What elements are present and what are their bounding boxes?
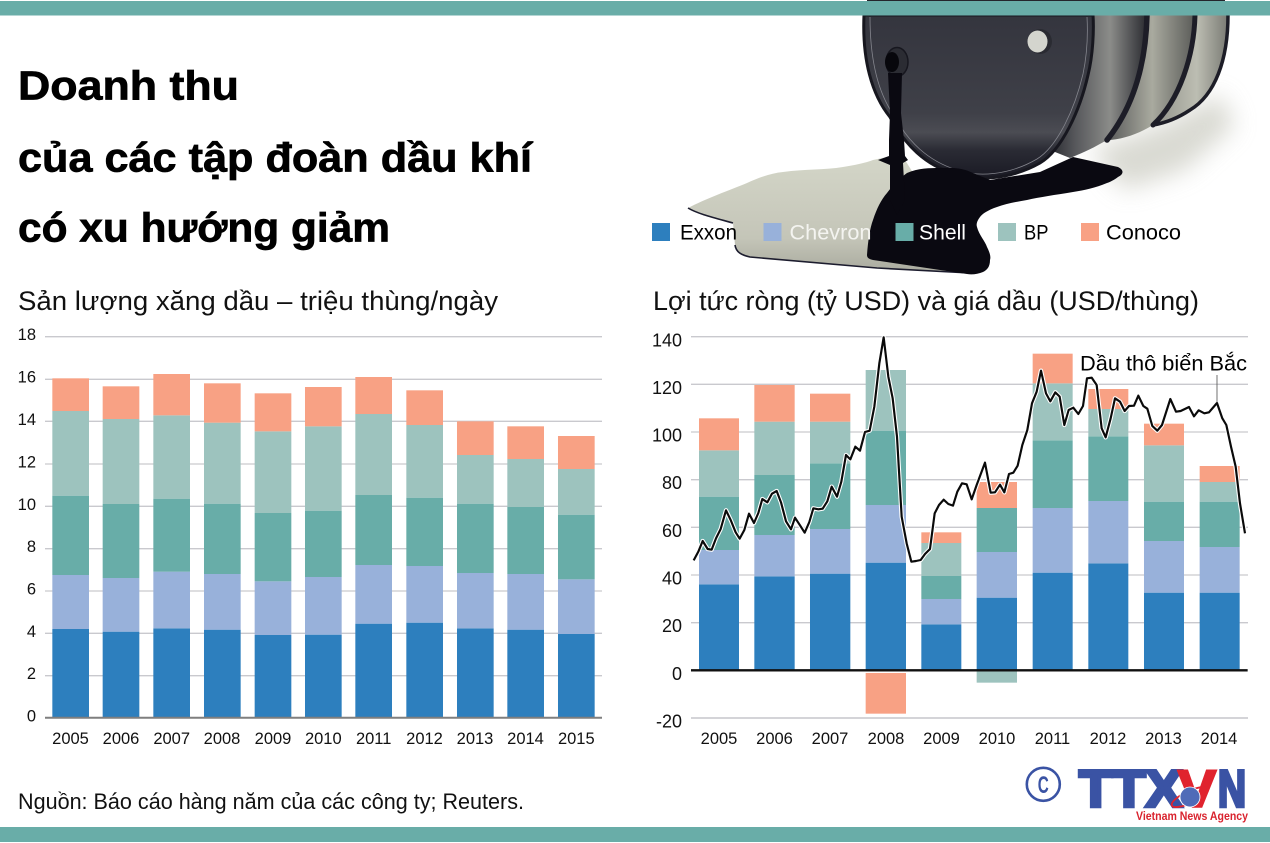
- left chart y-axis labels: 16: [18, 368, 36, 386]
- title: [18, 62, 534, 250]
- price line halo: [694, 337, 1245, 562]
- right chart: net profit stacked bars and oil price line: [652, 330, 1248, 748]
- left chart bars: [52, 374, 595, 718]
- legend item: Exxon: Exxon: [680, 220, 737, 244]
- right chart y-axis labels: 80: [662, 473, 682, 493]
- legend item: Chevron: Chevron: [790, 220, 872, 244]
- left chart x-axis years: 2011: [356, 730, 391, 748]
- barrel hole: [885, 48, 908, 76]
- left chart y-axis labels: 8: [27, 538, 36, 556]
- right chart x-axis years: 2007: [812, 730, 848, 748]
- North Sea crude price line: [694, 337, 1245, 562]
- zero baseline: [691, 667, 1248, 674]
- left chart x-axis years: 2014: [507, 730, 544, 748]
- right chart y-axis labels: [652, 330, 682, 732]
- left chart x-axis years: 2005: [52, 730, 89, 748]
- right chart x-axis years: [701, 730, 1237, 748]
- right chart y-axis labels: 140: [652, 330, 682, 350]
- left chart y-axis labels: 0: [27, 708, 36, 726]
- right chart y-axis labels: -20: [656, 712, 682, 732]
- title: của các tập đoàn dầu khí: [18, 134, 534, 180]
- logo globe: [1169, 783, 1211, 811]
- line callout leader: [1216, 375, 1218, 402]
- legend item: Conoco: Conoco: [1106, 220, 1181, 244]
- legend item: BP: BP: [1024, 220, 1048, 244]
- barrel front band: [1050, 15, 1147, 158]
- right chart y-axis labels: 20: [662, 616, 682, 636]
- legend item: Shell: Shell: [919, 220, 966, 244]
- left chart x-axis years: [52, 730, 595, 748]
- logo: copyright mark: [1027, 768, 1060, 801]
- logo: TTXVN Vietnam News Agency: Vietnam News Agency: [1136, 811, 1249, 823]
- right chart y-axis labels: 120: [652, 378, 682, 398]
- left chart x-axis years: 2006: [103, 730, 139, 748]
- legend item: Exxon: [652, 220, 737, 244]
- left chart x-axis years: 2010: [305, 730, 342, 748]
- left chart x-axis years: 2012: [406, 730, 443, 748]
- left chart: oil output stacked bars: [18, 326, 602, 748]
- left chart y-axis labels: 10: [18, 496, 36, 514]
- oil pool: [867, 157, 1122, 274]
- bottom band: [0, 827, 1270, 842]
- logo: TTXVN Vietnam News Agency: V: [1178, 760, 1216, 818]
- right chart x-axis years: 2008: [868, 730, 904, 748]
- legend: [652, 220, 1181, 244]
- left chart y-axis labels: 12: [18, 454, 36, 472]
- left chart x-axis years: 2009: [255, 730, 291, 748]
- logo: TTXVN Vietnam News Agency: [1079, 760, 1249, 823]
- barrel middle band: [1100, 15, 1195, 140]
- heading: left chart: Sản lượng xăng dầu – triệu thùng/ngày: [18, 286, 498, 316]
- soft floor shadow: [1090, 95, 1235, 190]
- logo: TTXVN Vietnam News Agency: N: [1218, 760, 1246, 818]
- barrel lid: [864, 15, 1093, 178]
- title: có xu hướng giảm: [18, 204, 390, 250]
- right chart y-axis labels: 0: [672, 664, 682, 684]
- right chart bars and line: [691, 337, 1248, 714]
- left chart x-axis years: 2013: [457, 730, 493, 748]
- silver bung cap: [1028, 29, 1052, 54]
- legend item: BP: [998, 220, 1048, 244]
- top band: [0, 0, 1270, 16]
- title: Doanh thu: [18, 62, 239, 108]
- left chart x-axis years: 2007: [153, 730, 190, 748]
- puddle dark edge: [688, 208, 970, 273]
- right chart y-axis labels: 100: [652, 426, 682, 446]
- left chart y-axis labels: 2: [27, 665, 36, 683]
- left chart y-axis labels: 18: [18, 326, 36, 344]
- legend item: Shell: [896, 220, 966, 244]
- left chart y-axis labels: 14: [18, 411, 36, 429]
- right chart x-axis years: 2006: [756, 730, 793, 748]
- illustration: oil barrel and spill: [688, 15, 1235, 274]
- barrel rear band: [1150, 15, 1228, 125]
- lid rim highlight: [870, 17, 1087, 174]
- right chart x-axis years: 2012: [1090, 730, 1126, 748]
- barrel ribs: [1107, 15, 1228, 140]
- right chart x-axis years: 2013: [1145, 730, 1182, 748]
- right chart x-axis years: 2014: [1201, 730, 1237, 748]
- logo: TTXVN Vietnam News Agency: TTX: [1079, 760, 1182, 818]
- left chart x-axis years: 2015: [558, 730, 595, 748]
- right chart x-axis years: 2005: [701, 730, 737, 748]
- right chart y-axis labels: 60: [662, 521, 682, 541]
- right chart x-axis years: 2009: [923, 730, 960, 748]
- oil stream: [878, 73, 908, 215]
- oil puddle, light: [688, 157, 970, 273]
- left chart y-axis labels: 4: [27, 623, 36, 641]
- left chart y-axis labels: [18, 326, 36, 726]
- left chart x-axis years: 2008: [204, 730, 240, 748]
- logo: copyright mark: C: [1038, 772, 1049, 799]
- right chart x-axis years: 2010: [979, 730, 1015, 748]
- right chart x-axis years: 2011: [1035, 730, 1070, 748]
- line callout label: Dầu thô biển Bắc: [1080, 350, 1247, 376]
- source note: Nguồn: Báo cáo hàng năm của các công ty; Reuters.: [18, 789, 524, 814]
- heading: right chart: Lợi tức ròng (tỷ USD) và giá dầu (USD/thùng): [653, 286, 1199, 316]
- right chart y-axis labels: 40: [662, 568, 682, 588]
- left chart y-axis labels: 6: [27, 580, 36, 598]
